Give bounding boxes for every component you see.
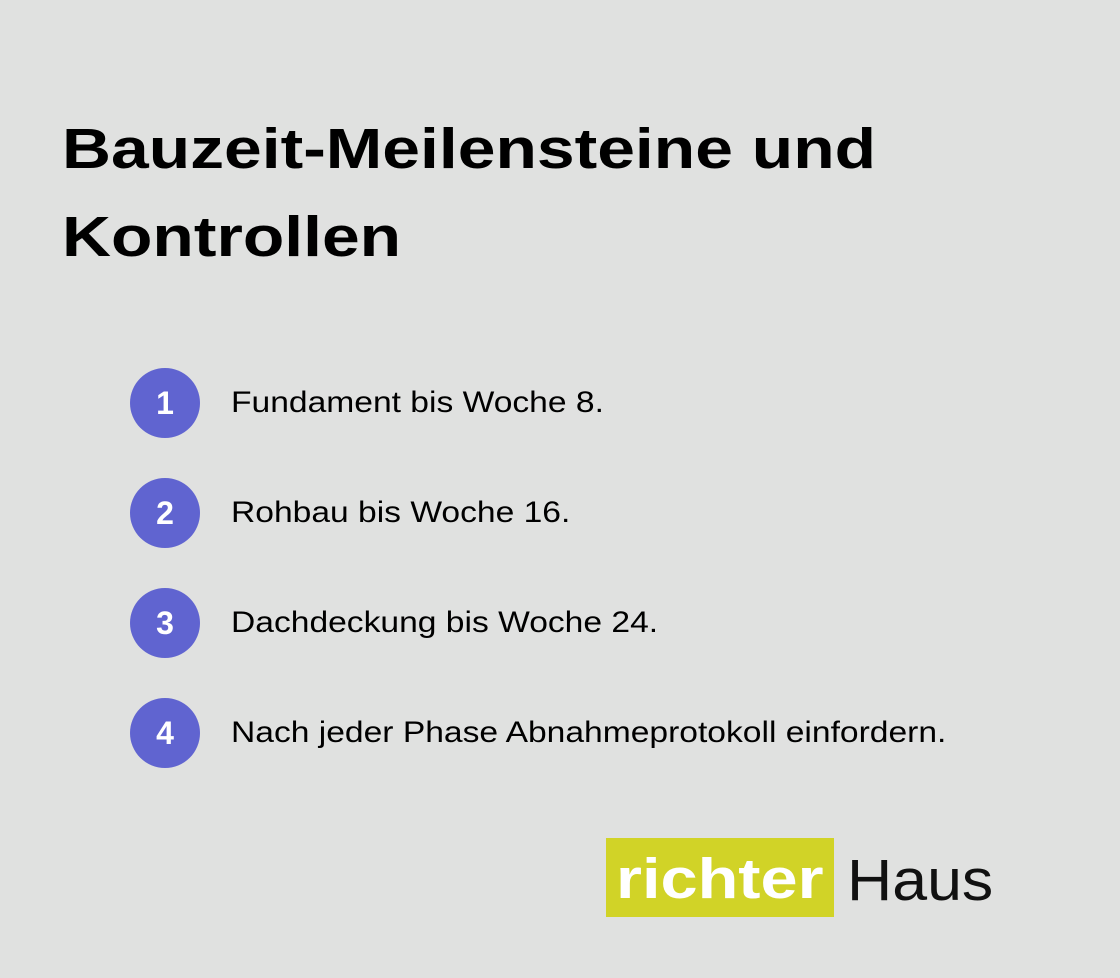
- item 2: Rohbau bis Woche 16.: [231, 496, 570, 529]
- logo: richter: [616, 847, 824, 911]
- item 3: 3: [156, 605, 174, 641]
- item 1: [130, 368, 604, 438]
- title: Bauzeit-Meilensteine und: [62, 117, 876, 181]
- item 4: Nach jeder Phase Abnahmeprotokoll einfordern.: [231, 716, 946, 749]
- item 3: Dachdeckung bis Woche 24.: [231, 606, 658, 639]
- item 4: 4: [156, 715, 174, 751]
- logo: Haus: [847, 848, 993, 913]
- item 4: [130, 698, 946, 768]
- title: Kontrollen: [62, 205, 401, 269]
- title: [62, 117, 876, 269]
- item 3: [130, 588, 658, 658]
- item 2: [130, 478, 570, 548]
- item 2: 2: [156, 495, 174, 531]
- logo: [606, 838, 993, 917]
- item 1: Fundament bis Woche 8.: [231, 386, 604, 419]
- item 1: 1: [156, 385, 174, 421]
